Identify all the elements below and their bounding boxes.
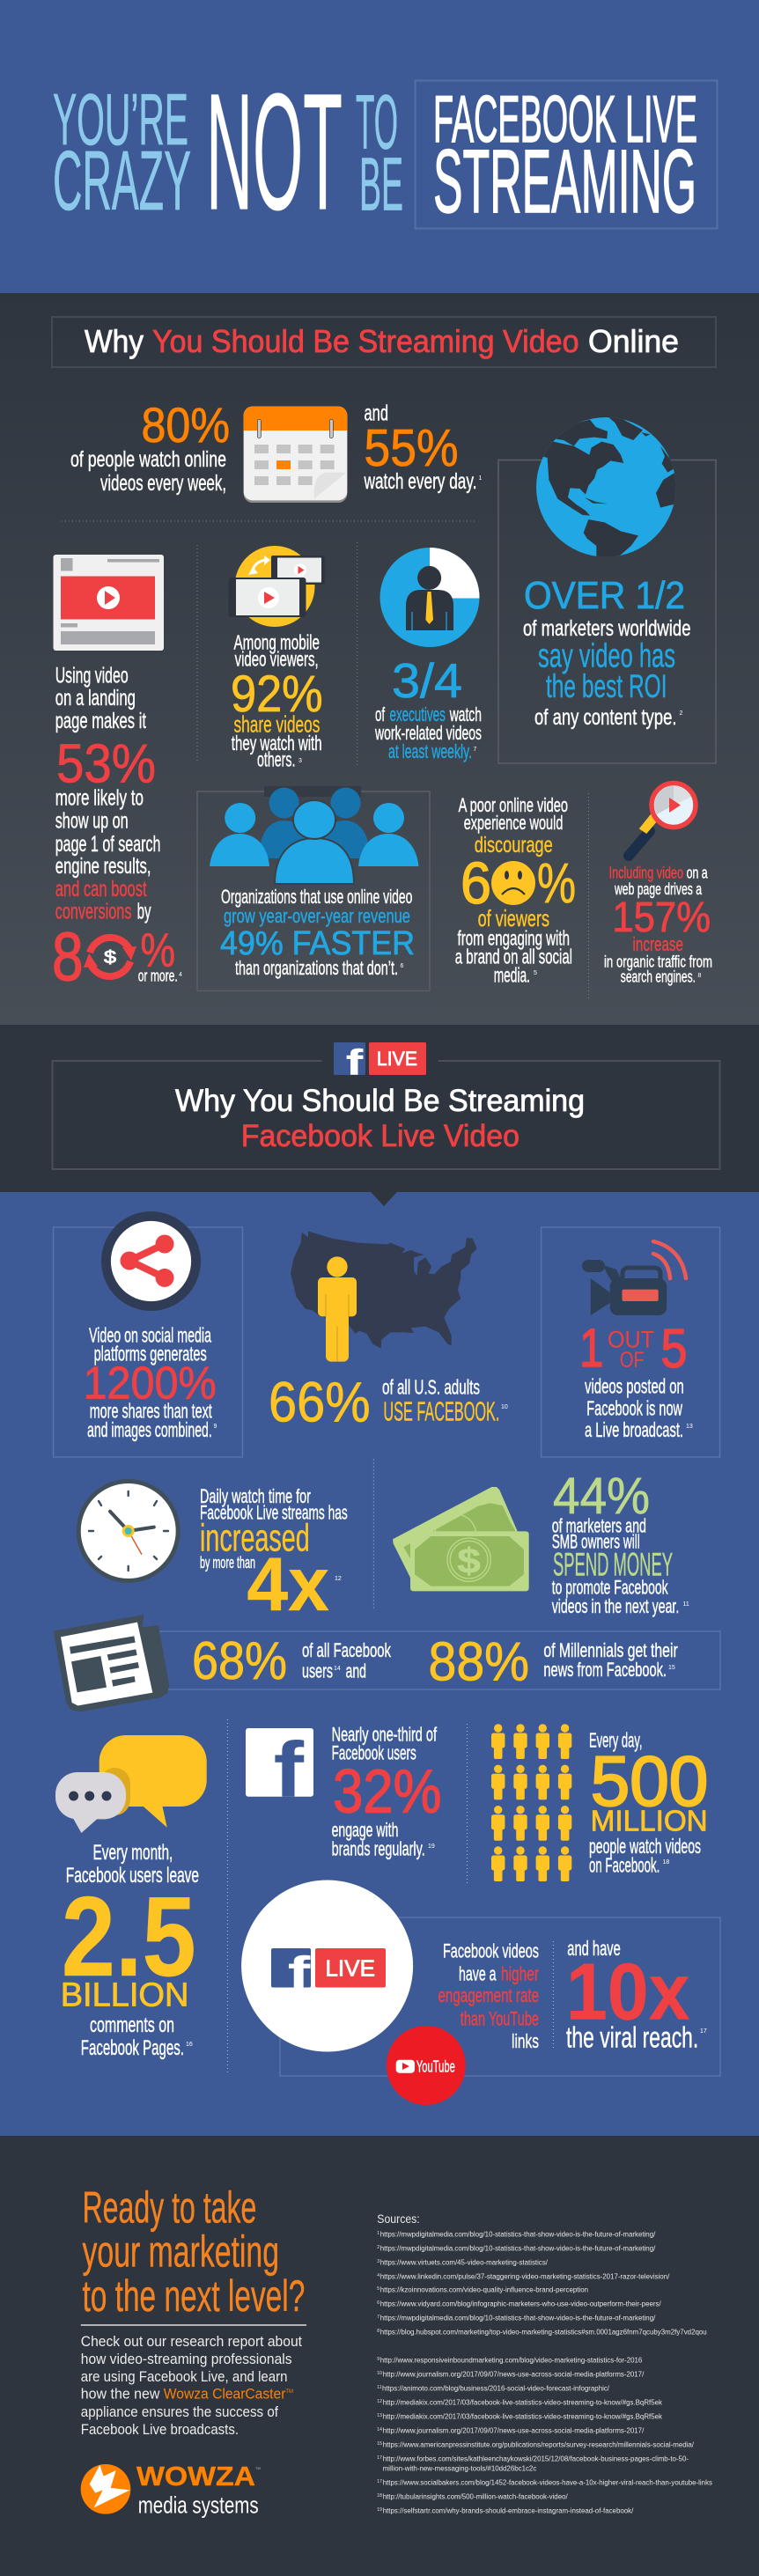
icon: group of people	[210, 786, 419, 884]
panel: landing page stat: 4	[179, 972, 182, 978]
panel: organizations 49 percent faster	[197, 786, 430, 991]
panel: 157 percent increase: Including video	[609, 863, 683, 882]
stat: 55 percent daily	[364, 401, 483, 494]
panel: landing page stat: page 1 of search	[55, 832, 161, 857]
panel: landing page stat: 53%	[56, 734, 156, 795]
panel: 44 percent spend money	[393, 1468, 689, 1617]
panel: 1 out of 5 videos: videos posted on	[585, 1375, 684, 1398]
icon: newspaper	[54, 1615, 169, 1711]
panel: 500 million viewers: MILLION	[591, 1804, 708, 1836]
sources list: 19	[377, 2507, 382, 2513]
panel: landing page stat	[52, 555, 182, 995]
panel: higher engagement than youtube: the viral reach.	[566, 2020, 698, 2053]
panel: 1200 percent more shares: 9	[213, 1424, 217, 1430]
panel: 60 percent discouraged: discourage	[475, 833, 553, 857]
panel: 500 million viewers: 500	[591, 1741, 708, 1820]
sources list: 18	[377, 2493, 382, 2499]
logo: wowza media systems: WOWZA	[136, 2461, 255, 2491]
sources list: https://www.socialbakers.com/blog/1452-facebook-videos-have-a-10x-higher-viral-reach-than-youtube-links	[383, 2479, 712, 2487]
sources list: http://www.forbes.com/sites/kathleenchaykowski/2015/12/08/facebook-business-pages-climb-to-50-	[383, 2455, 689, 2463]
panel: 60 percent discouraged: a brand on all social	[455, 946, 572, 968]
icon: facebook square: f	[274, 1726, 304, 1814]
panel: higher engagement than youtube: higher	[501, 1963, 539, 1985]
header background	[0, 0, 759, 293]
title: NOT	[206, 60, 343, 245]
heading: why you should be streaming video online	[52, 317, 716, 367]
panel: 60 percent discouraged: 5	[534, 970, 537, 976]
sources list: Sources:	[377, 2212, 420, 2226]
panel: 60 percent discouraged: 6	[461, 850, 491, 916]
panel: 3/4 of executives: watch	[449, 703, 482, 725]
stat: 55 percent daily: 1	[479, 475, 483, 482]
panel: 3/4 of executives: work-related videos	[374, 722, 482, 744]
stat: 80 percent weekly: of people watch online	[70, 447, 226, 472]
panel: 1 out of 5 videos: 1	[579, 1318, 604, 1378]
panel: organizations 49 percent faster: 49% FASTER	[220, 925, 415, 962]
sources list: http://www.responsiveinboundmarketing.com/blog/video-marketing-statistics-for-2016	[380, 2357, 643, 2365]
panel: landing page stat: Using video	[55, 663, 129, 688]
title: BE	[359, 143, 403, 227]
panel: 157 percent increase: 8	[697, 973, 701, 979]
panel: daily watch time 4x: Daily watch time for	[200, 1485, 311, 1507]
call to action text: Facebook Live broadcasts.	[81, 2421, 239, 2438]
panel: news from facebook: users	[302, 1660, 333, 1682]
sources list: 17	[377, 2455, 382, 2461]
panel: 500 million viewers: Every day,	[589, 1729, 643, 1752]
stat: 80 percent weekly: 80%	[141, 397, 230, 453]
panel: 1 out of 5 videos: Facebook is now	[586, 1396, 682, 1419]
panel: 2.5 billion comments	[55, 1735, 207, 2060]
panel: daily watch time 4x: increased	[200, 1516, 310, 1559]
stat: 80 percent weekly: videos every week,	[100, 471, 226, 496]
panel: landing page stat: conversions	[55, 900, 132, 924]
panel: 44 percent spend money: videos in the next year.	[552, 1595, 679, 1617]
call to action text: how the new	[81, 2386, 160, 2403]
panel: higher engagement than youtube: than YouTube	[461, 2007, 539, 2029]
panel: 66 percent use facebook	[269, 1231, 508, 1434]
heading: why you should be streaming video online: You Should Be Streaming Video	[152, 323, 579, 359]
icon: video camera	[582, 1241, 686, 1315]
panel: 2.5 billion comments: 2.5	[62, 1873, 196, 2000]
divider	[226, 1719, 228, 2075]
icon: facebook square	[246, 1726, 313, 1814]
panel: 92 percent share videos	[229, 546, 325, 771]
sources list: 4	[377, 2273, 380, 2278]
panel: 32 percent engage: brands regularly.	[332, 1838, 425, 1859]
panel: over half of marketers: OVER 1/2	[524, 575, 685, 617]
panel: 1200 percent more shares: platforms generates	[94, 1343, 207, 1365]
panel: 2.5 billion comments: Every month,	[93, 1841, 173, 1865]
panel: 92 percent share videos: share videos	[234, 710, 320, 737]
icon: mobile screens	[229, 546, 325, 627]
panel: news from facebook: of all Facebook	[302, 1639, 392, 1661]
panel: landing page stat: more likely to	[55, 786, 144, 811]
sources list: 1	[377, 2231, 380, 2236]
heading: why streaming facebook live video	[53, 1042, 720, 1169]
sources list: http://www.journalism.org/2017/09/07/news-use-across-social-media-platforms-2017/	[383, 2371, 645, 2379]
panel: 3/4 of executives: 3/4	[392, 653, 462, 708]
panel: 66 percent use facebook: USE FACEBOOK.	[383, 1396, 499, 1427]
icon: speech bubbles	[55, 1735, 207, 1833]
sources list: https://animoto.com/blog/business/2016-social-video-forecast-infographic/	[382, 2385, 610, 2393]
panel: landing page stat: by	[137, 900, 151, 924]
call to action heading: Ready to take	[83, 2182, 256, 2232]
sources list: http://mediakix.com/2017/03/facebook-live-statistics-video-streaming-to-know/#gs.BqRf5ek	[383, 2399, 663, 2407]
heading: why you should be streaming video online: Online	[588, 323, 679, 359]
panel: daily watch time 4x: Facebook Live streams has	[200, 1501, 348, 1523]
call to action heading	[81, 2182, 306, 2325]
panel: news from facebook: and	[345, 1660, 366, 1682]
logo: wowza media systems: media systems	[138, 2492, 259, 2519]
panel: 157 percent increase: search engines.	[621, 967, 696, 985]
sources list: 17	[377, 2479, 382, 2484]
panel: landing page stat: on a landing	[55, 686, 136, 710]
sources list: https://kzoinnovations.com/video-quality-influence-brand-perception	[380, 2286, 588, 2294]
call to action text: are using Facebook Live, and learn	[81, 2368, 287, 2385]
panel: landing page stat: page makes it	[55, 709, 146, 733]
icon: magnifying glass	[629, 784, 696, 856]
icon: facebook live badge	[334, 1042, 426, 1083]
call to action text: Wowza ClearCaster	[164, 2386, 286, 2403]
divider	[62, 520, 476, 522]
panel: 1 out of 5 videos	[542, 1227, 720, 1457]
panel: 60 percent discouraged: from engaging with	[458, 927, 570, 950]
panel: 92 percent share videos: Among mobile	[234, 630, 320, 653]
panel: daily watch time 4x	[77, 1479, 348, 1627]
stat: 55 percent daily: and	[365, 401, 388, 426]
panel: 1200 percent more shares: more shares than text	[90, 1399, 212, 1422]
call to action text: how video-streaming professionals	[81, 2351, 292, 2367]
icon: clock	[77, 1479, 181, 1583]
sources list: http://mediakix.com/2017/03/facebook-live-statistics-video-streaming-to-know/#gs.BqRf5ek	[383, 2413, 663, 2421]
icon: dollar conversion arrows: $	[104, 948, 116, 968]
panel: 500 million viewers	[491, 1724, 708, 1881]
panel: higher engagement than youtube: links	[512, 2030, 539, 2052]
panel: 92 percent share videos: they watch with	[232, 732, 322, 754]
panel: 44 percent spend money: 44%	[553, 1468, 650, 1525]
panel: 1 out of 5 videos: a Live broadcast.	[585, 1418, 683, 1441]
icon: globe	[536, 417, 676, 557]
panel: daily watch time 4x: 4x	[247, 1542, 329, 1627]
sources list: http://www.journalism.org/2017/09/07/news-use-across-social-media-platforms-2017/	[383, 2427, 645, 2435]
panel: over half of marketers	[498, 416, 716, 763]
panel: 157 percent increase: increase	[632, 933, 683, 955]
notch arrow	[371, 1192, 397, 1206]
sources list: https://mwpdigitalmedia.com/blog/10-statistics-that-show-video-is-the-future-of-marketing/	[380, 2245, 656, 2253]
panel: over half of marketers: of marketers worldwide	[523, 616, 690, 641]
sources list: 2	[377, 2245, 380, 2250]
panel: landing page stat: show up on	[55, 809, 129, 834]
panel: news from facebook: of Millennials get their	[543, 1639, 678, 1661]
panel: 1 out of 5 videos: OUT	[608, 1326, 654, 1352]
panel: landing page stat: %	[141, 924, 175, 977]
sources list: 14	[377, 2427, 382, 2432]
sources list: 13	[377, 2413, 382, 2418]
logo: wowza media systems: TM	[255, 2466, 261, 2470]
sources list: 15	[377, 2441, 382, 2447]
icon: facebook live circle: f	[288, 1947, 311, 1997]
panel: 32 percent engage: Facebook users	[332, 1742, 416, 1764]
divider	[372, 1460, 374, 1609]
heading: why streaming facebook live video: Why You Should Be Streaming	[175, 1084, 585, 1118]
sources list: 3	[377, 2259, 380, 2264]
panel: 44 percent spend money: SMB owners will	[552, 1531, 640, 1553]
panel: 92 percent share videos: 92%	[231, 666, 323, 723]
sources list: 5	[377, 2286, 380, 2292]
sources list	[377, 2212, 712, 2515]
sources list: 9	[377, 2357, 380, 2362]
icon: dollar conversion arrows	[84, 938, 136, 976]
panel: 60 percent discouraged	[455, 794, 576, 986]
panel: 44 percent spend money: of marketers and	[552, 1515, 646, 1537]
panel: landing page stat: or more.	[138, 967, 178, 985]
panel: 157 percent increase: 157%	[612, 894, 711, 941]
panel: daily watch time 4x: 12	[335, 1576, 342, 1582]
panel: 500 million viewers: on Facebook.	[589, 1853, 660, 1876]
panel: organizations 49 percent faster: Organizations that use online video	[221, 886, 412, 908]
icon: facebook live circle: LIVE	[325, 1954, 375, 1981]
call to action text: appliance ensures the success of	[81, 2403, 278, 2420]
title: TO	[356, 79, 398, 166]
sources list: https://mwpdigitalmedia.com/blog/10-statistics-that-show-video-is-the-future-of-marketing/	[380, 2315, 656, 2322]
call to action text: TM	[285, 2389, 293, 2395]
panel: 3/4 of executives	[374, 548, 482, 762]
call to action text	[81, 2333, 302, 2438]
panel: organizations 49 percent faster: 6	[400, 963, 403, 969]
stat: 55 percent daily: 55%	[365, 419, 458, 477]
panel: news from facebook: 88%	[428, 1632, 529, 1693]
panel: 157 percent increase: in organic traffic from	[604, 953, 712, 971]
panel: higher engagement than youtube: Facebook videos	[443, 1940, 539, 1962]
panel: 2.5 billion comments: BILLION	[61, 1977, 188, 2014]
call to action heading: your marketing	[83, 2227, 279, 2277]
panel: higher engagement than youtube: 17	[700, 2028, 707, 2035]
panel: 60 percent discouraged: %	[537, 851, 576, 915]
panel: landing page stat: 8	[52, 917, 84, 995]
panel: 2.5 billion comments: Facebook users leave	[66, 1864, 199, 1888]
panel: news from facebook: 68%	[192, 1631, 287, 1690]
panel: 1200 percent more shares: 1200%	[83, 1358, 217, 1409]
panel: 157 percent increase: web page drives a	[614, 880, 702, 898]
heading: why streaming facebook live video: Facebook Live Video	[241, 1119, 520, 1153]
panel: landing page stat: and can boost	[55, 877, 147, 902]
logo: wowza media systems	[81, 2461, 261, 2519]
panel: 92 percent share videos: others.	[257, 748, 295, 771]
panel: over half of marketers: 2	[680, 710, 683, 717]
icon: people grid	[491, 1724, 571, 1881]
heading: why you should be streaming video online: Why	[85, 323, 144, 359]
panel: 1200 percent more shares	[53, 1211, 243, 1457]
sources list: http://tubularinsights.com/500-million-watch-facebook-video/	[383, 2493, 568, 2501]
icon: share	[101, 1211, 201, 1311]
panel: 2.5 billion comments: 16	[186, 2042, 193, 2048]
panel: 44 percent spend money: 11	[683, 1601, 689, 1608]
panel: 66 percent use facebook: 10	[501, 1404, 508, 1410]
panel: 3/4 of executives: at least weekly.	[388, 740, 472, 762]
panel: 60 percent discouraged: A poor online video	[459, 794, 568, 816]
panel: 60 percent discouraged: of viewers	[478, 905, 549, 931]
panel: 66 percent use facebook: 66%	[269, 1371, 370, 1434]
sources list: 7	[377, 2315, 380, 2320]
title	[53, 60, 717, 245]
stat: 80 percent weekly	[70, 397, 230, 496]
panel: 32 percent engage: Nearly one-third of	[332, 1724, 438, 1745]
panel: 157 percent increase	[604, 784, 712, 985]
icon: sad face	[491, 861, 535, 905]
panel: 2.5 billion comments: Facebook Pages.	[81, 2036, 184, 2060]
panel: daily watch time 4x: by more than	[200, 1553, 255, 1571]
panel: higher engagement than youtube: and have	[567, 1937, 621, 1960]
icon: executive pie	[380, 548, 480, 647]
panel: higher engagement than youtube: engagement rate	[438, 1984, 539, 2006]
icon: facebook live circle	[241, 1880, 413, 2051]
panel: landing page stat: engine results,	[55, 854, 151, 879]
panel: over half of marketers: say video has	[538, 637, 675, 674]
sources list: https://www.linkedin.com/pulse/37-staggering-video-marketing-statistics-2017-razor-television/	[380, 2273, 670, 2281]
panel: 60 percent discouraged: experience would	[464, 812, 563, 834]
title: CRAZY	[53, 134, 191, 228]
section background: why streaming video	[0, 293, 759, 1025]
panel: 32 percent engage	[246, 1724, 441, 1859]
call to action text: Check out our research report about	[81, 2333, 302, 2350]
panel: 157 percent increase: on a	[687, 863, 708, 882]
panel: 92 percent share videos: video viewers,	[235, 647, 319, 670]
stat: 55 percent daily: watch every day.	[364, 469, 477, 494]
panel: 66 percent use facebook: of all U.S. adults	[382, 1376, 480, 1399]
call to action heading: to the next level?	[83, 2271, 305, 2321]
panel: over half of marketers: the best ROI	[546, 668, 667, 704]
panel: over half of marketers: of any content type.	[534, 705, 676, 730]
sources list: 8	[377, 2329, 380, 2334]
sources list: million-with-new-messaging-tools/#10dd26bc1c2c	[383, 2465, 536, 2473]
sources list: https://www.vidyard.com/blog/infographic-marketers-who-use-video-outperform-their-peers/	[380, 2300, 661, 2308]
panel: higher engagement than youtube: have a	[459, 1963, 497, 1985]
sources list: https://www.virtuets.com/45-video-marketing-statistics/	[380, 2259, 549, 2267]
panel: 1 out of 5 videos: 5	[660, 1319, 688, 1380]
sources list: 10	[377, 2371, 382, 2376]
section background: footer	[0, 2136, 759, 2576]
panel: 3/4 of executives: of	[375, 703, 386, 725]
panel: 1200 percent more shares: and images combined.	[87, 1418, 212, 1441]
panel: 3/4 of executives: 7	[474, 747, 477, 753]
panel: news from facebook: 15	[668, 1665, 675, 1671]
panel: organizations 49 percent faster: than organizations that don’t.	[235, 957, 398, 979]
sources list: 11	[377, 2385, 382, 2390]
panel: organizations 49 percent faster: grow year-over-year revenue	[224, 905, 410, 927]
panel: 1200 percent more shares: Video on social media	[89, 1324, 211, 1347]
panel: news from facebook	[54, 1615, 720, 1711]
icon: money	[393, 1487, 529, 1591]
panel: 32 percent engage: engage with	[332, 1819, 398, 1841]
sources list: 6	[377, 2300, 380, 2306]
panel: 44 percent spend money: to promote Facebook	[552, 1576, 668, 1598]
icon: youtube circle	[387, 2026, 466, 2105]
panel: 2.5 billion comments: comments on	[90, 2013, 174, 2037]
icon: calendar	[244, 407, 347, 503]
icon: facebook live badge: LIVE	[377, 1048, 417, 1070]
sources list: https://blog.hubspot.com/marketing/top-video-marketing-statistics#sm.0001agz6fnm7qcuby3m2fy7vd2qou	[380, 2329, 707, 2337]
sources list: https://selfstartr.com/why-brands-should-embrace-instagram-instead-of-facebook/	[383, 2507, 634, 2515]
sources list: https://www.americanpressinstitute.org/publications/reports/survey-research/millennials-social-media/	[383, 2441, 695, 2449]
title: YOU’RE	[53, 78, 188, 160]
icon: landing page with video	[53, 555, 164, 651]
sources list: https://mwpdigitalmedia.com/blog/10-statistics-that-show-video-is-the-future-of-marketing/	[380, 2231, 656, 2239]
sources list: 12	[377, 2399, 382, 2404]
panel: news from facebook: 14	[334, 1666, 341, 1672]
panel: 3/4 of executives: executives	[389, 703, 446, 725]
icon: youtube circle: YouTube	[416, 2058, 455, 2076]
panel: higher engagement than youtube	[241, 1880, 720, 2105]
panel: 1 out of 5 videos: 13	[686, 1424, 693, 1430]
panel: higher engagement than youtube: 10x	[566, 1947, 689, 2036]
panel: 32 percent engage: 32%	[333, 1757, 441, 1826]
icon: facebook live badge: f	[346, 1042, 363, 1083]
panel: 1 out of 5 videos: OF	[620, 1348, 645, 1373]
section background: facebook live heading	[0, 1025, 759, 1192]
panel: news from facebook: news from Facebook.	[543, 1659, 667, 1681]
panel: 32 percent engage: 19	[428, 1844, 435, 1850]
panel: 92 percent share videos: 3	[298, 758, 302, 764]
panel: 60 percent discouraged: media.	[494, 963, 530, 986]
icon: US map with person	[291, 1231, 477, 1362]
panel: 500 million viewers: 18	[662, 1859, 669, 1866]
icon: money: $	[457, 1542, 481, 1581]
section background: facebook live stats	[0, 1192, 759, 2136]
